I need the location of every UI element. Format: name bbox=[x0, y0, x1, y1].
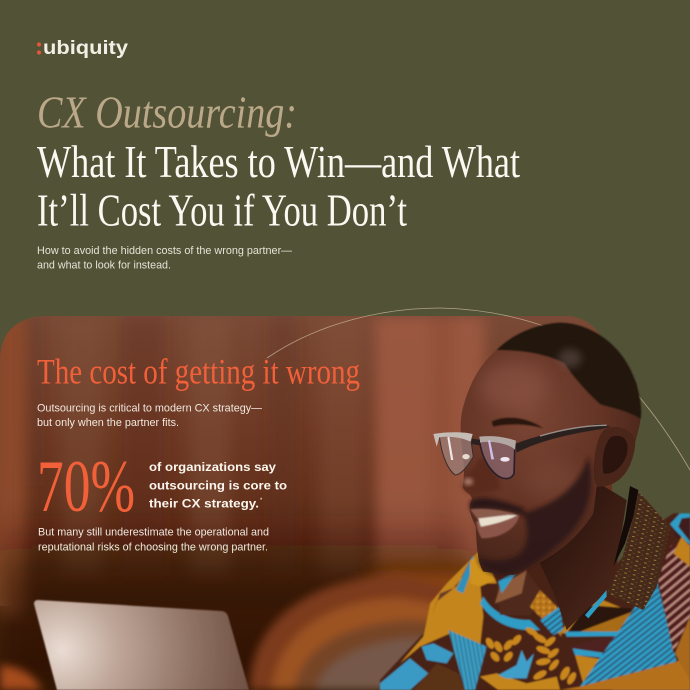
hair bbox=[497, 323, 641, 419]
logo: ubiquity bbox=[43, 37, 128, 59]
title: It’ll Cost You if You Don’t bbox=[37, 184, 407, 236]
blue star bbox=[498, 650, 534, 678]
warm floor glow bbox=[365, 559, 466, 589]
shirt bbox=[380, 513, 690, 690]
subtitle: How to avoid the hidden costs of the wrong partner— bbox=[37, 245, 292, 257]
leaf motif left bbox=[484, 633, 523, 663]
gold placket bbox=[530, 590, 562, 637]
lower shadow bbox=[0, 510, 470, 690]
lower body gold bbox=[480, 673, 560, 690]
subtitle bbox=[37, 245, 292, 272]
hair highlight bbox=[558, 349, 582, 368]
laptop bbox=[34, 600, 249, 690]
closing text bbox=[38, 526, 269, 554]
statistic description: their CX strategy. bbox=[149, 496, 259, 510]
blurred foreground object bbox=[0, 665, 42, 690]
right panels bbox=[560, 593, 640, 637]
closing text: reputational risks of choosing the wrong partner. bbox=[38, 542, 268, 554]
ear bbox=[594, 427, 635, 487]
panel: blurred photo background bbox=[0, 316, 612, 690]
nose bbox=[463, 457, 500, 494]
eyebrow bbox=[492, 418, 543, 428]
left edge light bbox=[0, 316, 12, 606]
closing text: But many still underestimate the operational and bbox=[38, 526, 269, 538]
title: What It Takes to Win—and What bbox=[37, 136, 520, 187]
panel intro text: Outsourcing is critical to modern CX strategy— bbox=[37, 402, 262, 414]
title: CX Outsourcing: bbox=[37, 86, 297, 138]
forehead highlight bbox=[480, 363, 547, 410]
head bbox=[461, 342, 640, 575]
collar left bbox=[480, 597, 540, 630]
collar bbox=[607, 487, 670, 610]
statistic description: * bbox=[260, 498, 263, 504]
title bbox=[37, 86, 520, 236]
left sleeve bbox=[400, 552, 497, 663]
chair bbox=[250, 574, 470, 690]
glasses bbox=[433, 424, 611, 479]
neck bbox=[523, 480, 627, 630]
panel heading: The cost of getting it wrong bbox=[37, 352, 360, 392]
leaf motif right bbox=[524, 626, 578, 686]
photo: man with glasses bbox=[380, 323, 690, 690]
beard bbox=[470, 457, 591, 576]
mouth bbox=[470, 509, 519, 538]
statistic description: of organizations say bbox=[149, 460, 276, 474]
thin curved line bbox=[267, 308, 690, 470]
cheek shading bbox=[525, 460, 582, 500]
statistic: 70%: 70% bbox=[37, 446, 135, 528]
wood wall stripes bbox=[0, 316, 485, 616]
statistic description bbox=[149, 460, 287, 510]
panel intro text bbox=[37, 402, 262, 429]
subtitle: and what to look for instead. bbox=[37, 260, 171, 272]
statistic description: outsourcing is core to bbox=[149, 478, 287, 492]
panel intro text: but only when the partner fits. bbox=[37, 417, 179, 429]
